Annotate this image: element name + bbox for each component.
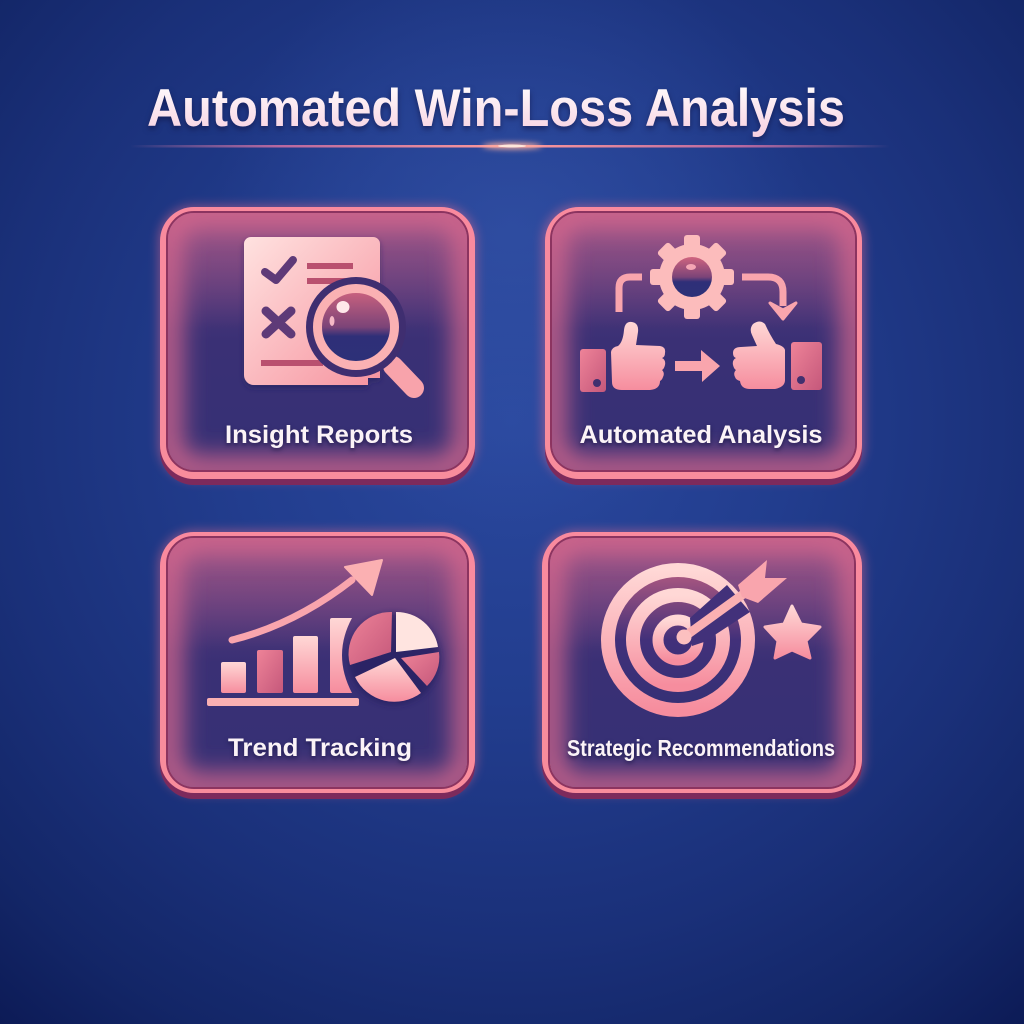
icon: report with magnifier	[244, 237, 414, 388]
loop arrow: right	[742, 277, 796, 319]
panel: insight reports	[158, 205, 477, 485]
pie chart	[348, 612, 440, 705]
left thumb	[580, 322, 665, 392]
title underline	[130, 143, 890, 149]
panel: automated analysis	[542, 205, 865, 485]
icon: target, arrow and star	[608, 560, 820, 710]
bars	[207, 618, 359, 706]
panel: strategic recommendations	[540, 530, 865, 799]
right thumb	[733, 322, 822, 390]
title: Automated Win-Loss Analysis	[147, 79, 845, 138]
arrow	[676, 560, 787, 644]
icon: gear and thumbs	[580, 235, 822, 392]
icon: bars, arrow and pie	[207, 560, 440, 706]
gear	[650, 235, 734, 319]
target	[608, 570, 750, 710]
label: Strategic Recommendations	[567, 735, 835, 761]
loop arrow: left	[619, 277, 642, 312]
middle arrow	[675, 350, 720, 382]
star	[765, 606, 820, 658]
panel: trend tracking	[158, 530, 477, 799]
label: Automated Analysis	[580, 421, 822, 449]
label: Trend Tracking	[228, 734, 412, 762]
label: Insight Reports	[225, 421, 413, 449]
trend arrow	[232, 560, 382, 640]
